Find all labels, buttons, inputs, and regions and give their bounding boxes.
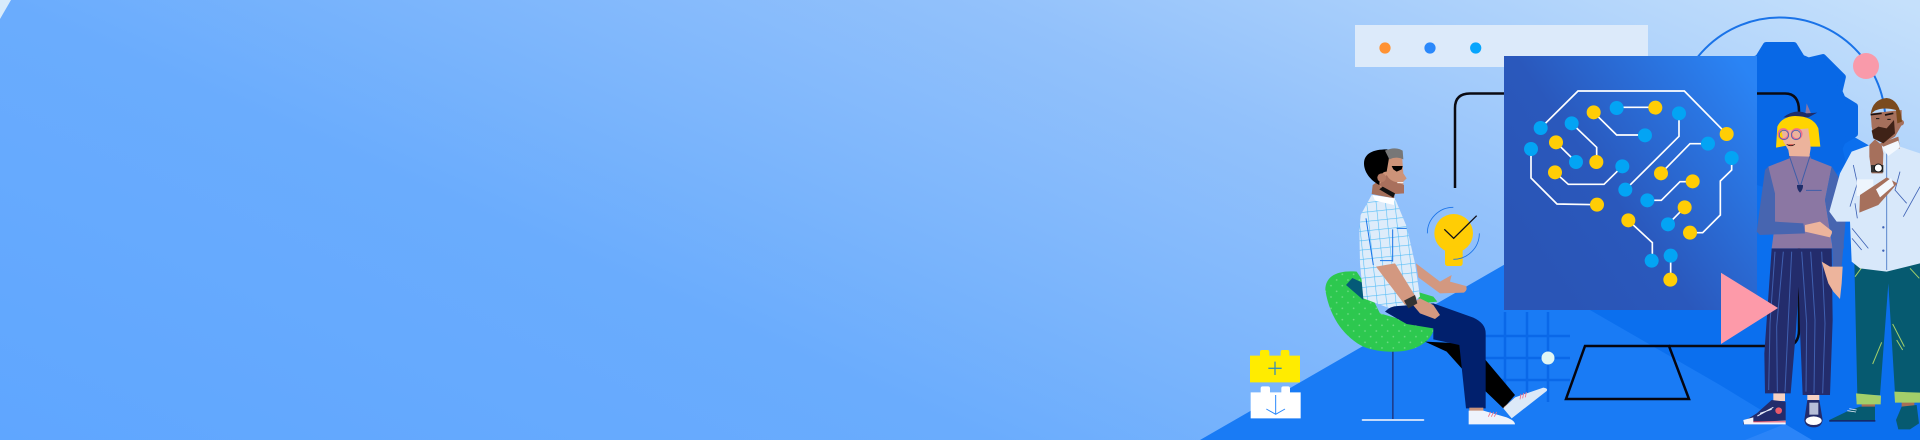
gear [1754,42,1858,164]
back leg and shoe [1425,342,1547,418]
standing man [1829,98,1920,429]
floor [1200,138,1920,440]
head and raised arm [1859,98,1904,213]
front arm and watch [1376,263,1440,319]
chair stand [1325,271,1437,421]
white block [1251,386,1301,418]
corner triangle [0,0,11,19]
connector line [1455,94,1799,346]
grid [1485,312,1570,402]
top [1757,155,1844,250]
standing woman [1743,103,1846,427]
brain panel [1504,56,1757,310]
window bar with dots [1355,25,1648,67]
seated man and chair [1325,148,1547,424]
arc around gear [1697,16,1886,146]
cuffs and shoes [1829,392,1920,429]
arm and hand [1822,220,1846,299]
grid dot [1542,352,1554,364]
shirt [1359,195,1420,308]
front trouser leg [1385,303,1515,424]
light bulb with check [1427,207,1479,266]
shoes [1743,400,1823,427]
pink circle [1853,53,1879,79]
teal trousers [1854,262,1920,395]
play triangle [1721,273,1778,344]
head [1364,148,1407,205]
yellow block [1250,350,1300,382]
monitor stand [1566,346,1689,399]
back arm [1416,263,1467,293]
brain circuit [1524,91,1739,287]
head [1776,103,1820,157]
trousers [1764,248,1833,401]
lego blocks [1250,350,1301,418]
white shirt [1829,145,1920,272]
